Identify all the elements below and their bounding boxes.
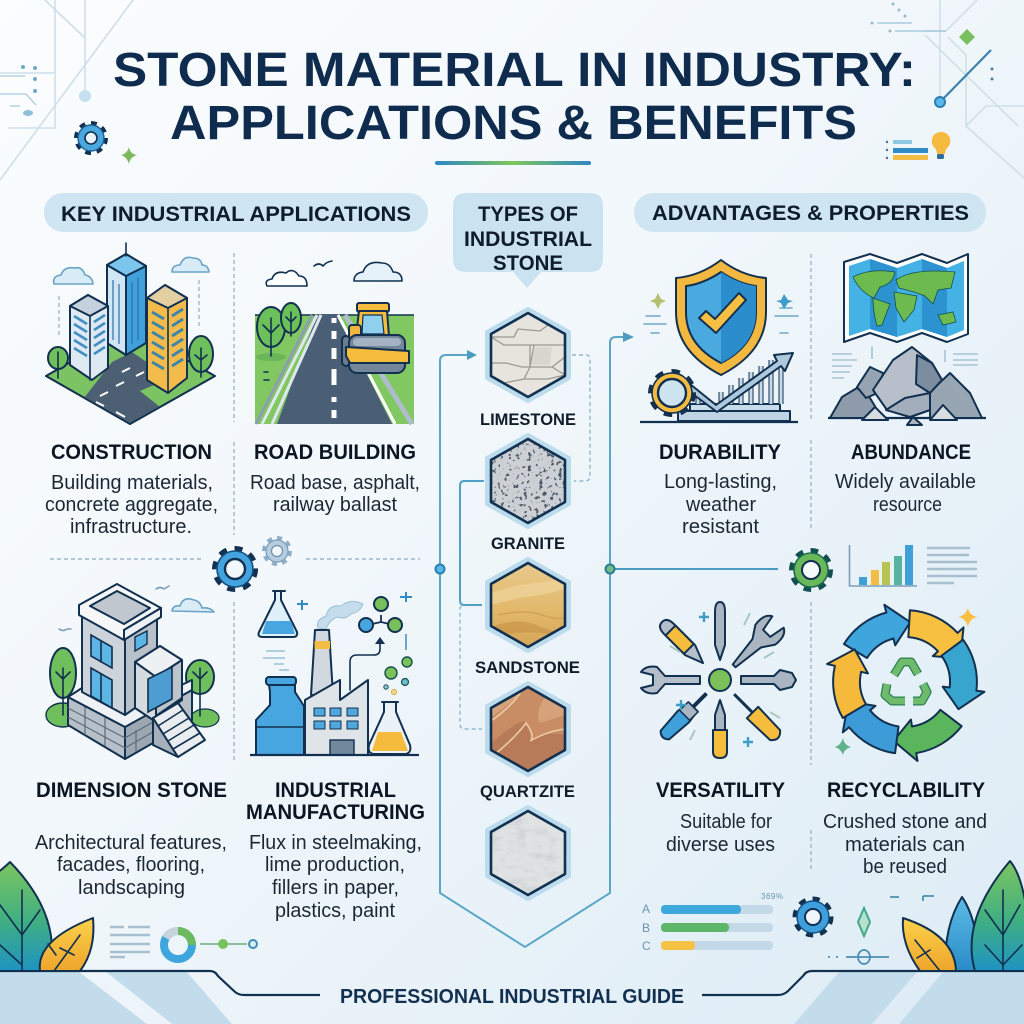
label: recyclability: RECYCLABILITY	[827, 779, 985, 802]
mini progress bars	[642, 892, 783, 953]
label: industrial manufacturing	[246, 779, 425, 824]
arrow: bottom left blue	[832, 687, 908, 769]
icon: recycle symbol	[885, 662, 927, 701]
mini progress bars: C	[642, 939, 651, 953]
icon: green sparkle top left	[121, 147, 137, 164]
mini progress bars: 369%	[761, 892, 783, 901]
stone: sandstone	[487, 559, 569, 651]
dividers	[50, 253, 811, 872]
label: sandstone: SANDSTONE	[475, 658, 580, 677]
mini donut and list	[110, 927, 257, 959]
icon: small gray-blue gear	[265, 539, 289, 563]
text: industrial manufacturing body: plastics, paint	[275, 899, 395, 922]
text: dimension stone body: landscaping	[78, 876, 185, 899]
text: industrial manufacturing body: lime production,	[265, 853, 405, 876]
text: road building body	[250, 471, 420, 516]
text: industrial manufacturing body	[249, 831, 422, 922]
mini bars and lightbulb	[886, 132, 950, 160]
label: versatility: VERSATILITY	[656, 779, 785, 802]
decorative circuit lines: top left	[0, 0, 133, 180]
icon: green sparkle	[835, 738, 851, 755]
label: industrial manufacturing: INDUSTRIAL	[275, 779, 396, 802]
text: durability body: Long-lasting,	[664, 470, 777, 493]
text: recyclability body: be reused	[863, 855, 947, 878]
text: durability body: resistant	[682, 515, 759, 538]
icon: recyclability arrows	[808, 592, 1000, 769]
label: dimension stone: DIMENSION STONE	[36, 779, 227, 802]
icon: abundance map and rocks	[828, 254, 986, 425]
heading: types of industrial stone: INDUSTRIAL	[464, 228, 592, 251]
text: industrial manufacturing body: fillers in paper,	[272, 876, 399, 899]
heading: types of industrial stone	[453, 193, 603, 288]
icon: yellow sparkle	[959, 608, 977, 627]
small circuit marks	[828, 896, 934, 964]
icon: versatility tools	[641, 602, 796, 758]
arrow: left yellow	[808, 641, 886, 725]
footer rule	[0, 971, 1024, 995]
label: quartzite: QUARTZITE	[480, 782, 575, 801]
mini bar chart	[850, 545, 977, 586]
icon: green gear	[793, 552, 829, 588]
icon: left leaves	[0, 862, 93, 971]
label: abundance: ABUNDANCE	[851, 441, 971, 464]
stone: fifth unlabeled marble	[487, 807, 569, 899]
heading: advantages and properties: ADVANTAGES & PROPERTIES	[652, 202, 969, 225]
icon: right leaves	[903, 861, 1024, 971]
node: right connector	[606, 564, 614, 574]
icon: blue gear bottom right	[796, 900, 830, 934]
tool: pencil northwest	[657, 617, 708, 668]
tool: screwdriver north	[715, 602, 725, 660]
text: durability body	[664, 470, 777, 538]
text: dimension stone body: facades, flooring,	[57, 853, 205, 876]
label: granite: GRANITE	[491, 534, 565, 553]
label: construction: CONSTRUCTION	[51, 441, 212, 464]
arrow: top left blue	[844, 605, 910, 658]
text: construction body: Building materials,	[51, 471, 213, 494]
stone: quartzite	[487, 683, 569, 775]
text: abundance body: resource	[873, 493, 942, 516]
title	[113, 44, 916, 150]
icon: construction city	[46, 243, 215, 424]
title: STONE MATERIAL IN INDUSTRY:	[113, 44, 916, 97]
text: versatility body: diverse uses	[666, 833, 775, 856]
stone: granite	[487, 435, 569, 527]
text: recyclability body: Crushed stone and	[823, 810, 987, 833]
tool: screwdriver southeast	[728, 688, 784, 744]
text: durability body: weather	[685, 493, 756, 516]
text: dimension stone body: Architectural features,	[35, 831, 227, 854]
tool: blue handled southwest	[657, 688, 712, 743]
decorative circuit lines: top right	[870, 0, 1024, 178]
tool: wrench west	[641, 667, 700, 693]
text: dimension stone body	[35, 831, 227, 899]
label: durability: DURABILITY	[659, 441, 781, 464]
stone: limestone	[487, 309, 569, 401]
icon: durability shield	[640, 260, 798, 422]
mini progress bars: B	[642, 921, 650, 935]
node: left connector	[436, 564, 444, 574]
text: construction body: infrastructure.	[70, 515, 192, 538]
label: road building: ROAD BUILDING	[254, 441, 416, 464]
footer band panels	[0, 971, 1024, 1024]
icon: large blue gear	[216, 550, 254, 588]
text: road building body: railway ballast	[273, 493, 397, 516]
text: construction body: concrete aggregate,	[45, 493, 218, 516]
tool: wrench northeast	[724, 612, 788, 676]
text: industrial manufacturing body: Flux in steelmaking,	[249, 831, 422, 854]
icon: teal sparkle	[858, 908, 870, 936]
text: road building body: Road base, asphalt,	[250, 471, 420, 494]
heading: types of industrial stone: TYPES OF	[478, 203, 578, 226]
text: abundance body	[835, 470, 976, 516]
label: industrial manufacturing: MANUFACTURING	[246, 801, 425, 824]
text: versatility body	[666, 810, 775, 856]
footer text: PROFESSIONAL INDUSTRIAL GUIDE	[340, 986, 684, 1008]
text: abundance body: Widely available	[835, 470, 976, 493]
text: versatility body: Suitable for	[680, 810, 772, 833]
icon: green diamond	[959, 29, 975, 45]
arrow: right teal	[925, 634, 1000, 716]
arrow: top right yellow	[898, 592, 976, 675]
heading: advantages and properties	[634, 193, 986, 232]
text: construction body	[45, 471, 218, 538]
heading: key industrial applications: KEY INDUSTRIAL APPLICATIONS	[61, 203, 411, 226]
arrow: bottom right green	[892, 705, 963, 765]
icon: road with roller	[255, 261, 414, 424]
heading: types of industrial stone: STONE	[493, 252, 563, 275]
mini progress bars: A	[642, 902, 650, 916]
icon: industrial manufacturing	[250, 591, 419, 755]
connector: outer frame with arrows	[440, 332, 778, 947]
title: APPLICATIONS & BENEFITS	[170, 97, 857, 150]
title underline	[435, 161, 591, 165]
connectors between stones	[460, 355, 590, 729]
text: recyclability body: materials can	[845, 833, 965, 856]
heading: key industrial applications	[44, 193, 428, 232]
node: blue circle top right	[935, 97, 945, 107]
label: limestone: LIMESTONE	[480, 410, 576, 429]
icon: gear top left	[78, 125, 104, 151]
tool: yellow south	[713, 700, 727, 758]
tool: hammer east	[741, 670, 796, 690]
text: recyclability body	[823, 810, 987, 878]
icon: dimension stone building	[46, 584, 219, 759]
